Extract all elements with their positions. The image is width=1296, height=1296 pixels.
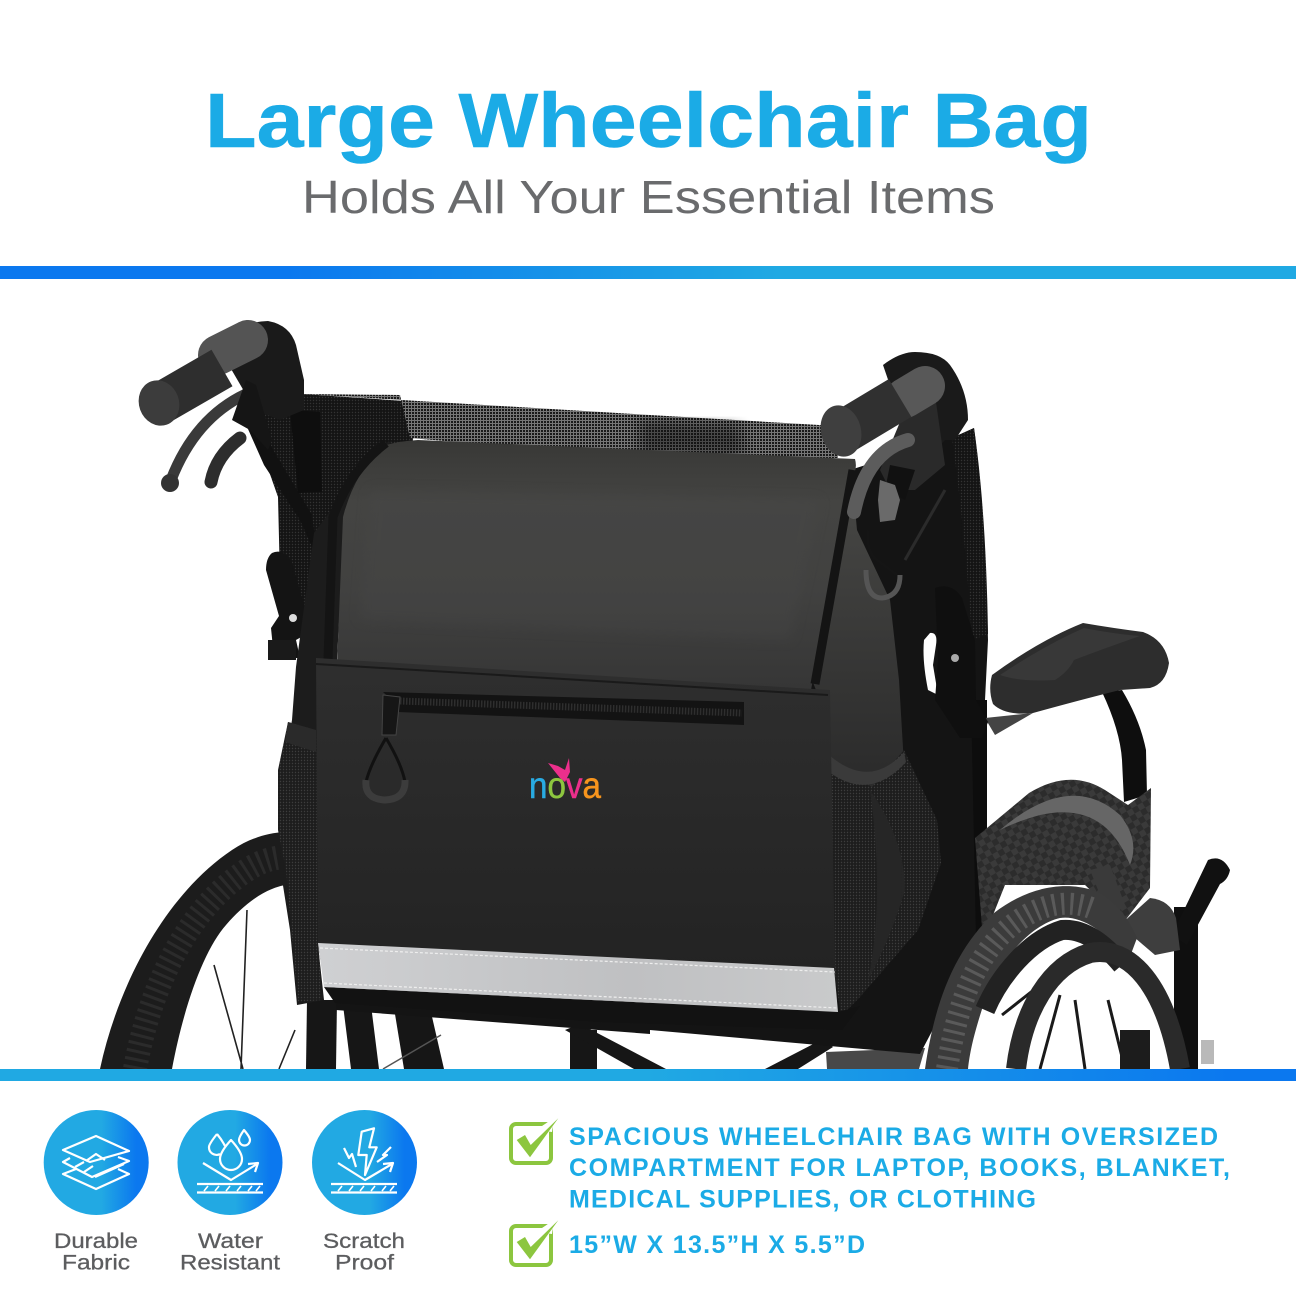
icon label: water resistant: Resistant <box>180 1250 280 1274</box>
left lever body <box>232 380 272 450</box>
icon label: scratch proof <box>323 1229 405 1274</box>
product photo: wheelchair with bag <box>100 321 1230 1069</box>
top backrest mesh strip <box>303 394 838 458</box>
left lid zipper <box>328 443 386 660</box>
right lever body <box>880 395 945 490</box>
zipper teeth <box>400 701 742 713</box>
strip stitches <box>320 948 838 1008</box>
zipper loop <box>366 738 405 800</box>
icon label: durable fabric <box>54 1229 138 1274</box>
right grip end <box>815 401 867 461</box>
icon label: scratch proof: Scratch <box>323 1229 405 1253</box>
left grip <box>163 368 222 402</box>
lid highlight <box>360 490 820 640</box>
right footrest lever <box>1120 858 1230 1069</box>
right grip hub <box>905 386 925 398</box>
left mesh pocket <box>278 722 322 1002</box>
front pocket top seam <box>316 664 828 695</box>
right pocket band <box>829 752 906 785</box>
icon: durable fabric <box>44 1110 149 1215</box>
hanging loop <box>866 490 945 598</box>
icon label: water resistant: Water <box>198 1229 263 1253</box>
right second lever <box>878 480 900 522</box>
icon: scratch proof <box>312 1110 417 1215</box>
right frame top <box>883 352 968 470</box>
icon: water resistant <box>178 1110 282 1215</box>
checkbox icon 1 <box>511 1118 558 1163</box>
subtitle: Holds All Your Essential Items <box>302 171 995 223</box>
bottom divider bar <box>0 1069 1296 1081</box>
right side panel <box>812 465 904 790</box>
reflective strip <box>318 943 838 1012</box>
left second lever <box>211 438 240 482</box>
front pocket panel <box>316 658 838 1012</box>
feature text: spacious compartment: SPACIOUS WHEELCHAIR BAG WITH OVERSIZED <box>569 1123 1218 1151</box>
bag left side panel <box>279 441 392 1005</box>
right backrest strap <box>952 428 988 640</box>
left pocket band <box>285 722 316 752</box>
left rear wheel <box>100 832 295 1069</box>
left grip end <box>132 375 186 431</box>
right frame post <box>971 700 987 940</box>
backrest opening <box>924 633 938 695</box>
left grip hub <box>218 340 248 355</box>
feature text: spacious compartment: COMPARTMENT FOR LAPTOP, BOOKS, BLANKET, <box>569 1154 1230 1182</box>
checkbox icon 2 <box>511 1220 558 1265</box>
icon label: durable fabric: Durable <box>54 1229 138 1253</box>
feature text: spacious compartment <box>569 1123 1230 1214</box>
feature text: spacious compartment: MEDICAL SUPPLIES, OR CLOTHING <box>569 1186 1036 1214</box>
bag bottom <box>324 987 860 1030</box>
right backrest mesh <box>640 428 988 1054</box>
nova logo: nova <box>529 765 601 806</box>
skirt guard <box>975 780 1151 940</box>
left frame top <box>220 321 304 420</box>
right mesh pocket <box>830 750 941 1016</box>
feature text: dimensions: 15”W X 13.5”H X 5.5”D <box>569 1231 865 1259</box>
under-bag frame tubes <box>306 1000 925 1069</box>
title: Large Wheelchair Bag <box>205 78 1092 164</box>
left backrest mesh and frame <box>244 394 420 660</box>
wheelchair bag <box>278 440 941 1030</box>
icon label: water resistant <box>180 1229 280 1274</box>
mesh pocket fold <box>868 790 905 980</box>
left brake lever <box>161 394 246 492</box>
armrest pad <box>985 623 1169 735</box>
right handle <box>815 386 945 598</box>
right clip joint <box>935 586 988 738</box>
icon label: scratch proof: Proof <box>335 1250 394 1274</box>
left handle <box>132 321 968 492</box>
zipper pull <box>382 695 400 735</box>
right grey lever <box>854 440 908 512</box>
right lid zipper <box>815 470 853 684</box>
mottled strip shading <box>640 420 745 455</box>
right lever dark slot <box>885 465 915 500</box>
top lid <box>337 440 856 690</box>
icon label: durable fabric: Fabric <box>62 1250 130 1274</box>
top divider bar <box>0 266 1296 279</box>
right grip <box>845 398 900 431</box>
right rear wheel <box>925 886 1180 1069</box>
front pocket zipper <box>383 692 744 725</box>
armrest tube <box>1102 690 1147 802</box>
under-bag left mesh band <box>336 998 650 1034</box>
